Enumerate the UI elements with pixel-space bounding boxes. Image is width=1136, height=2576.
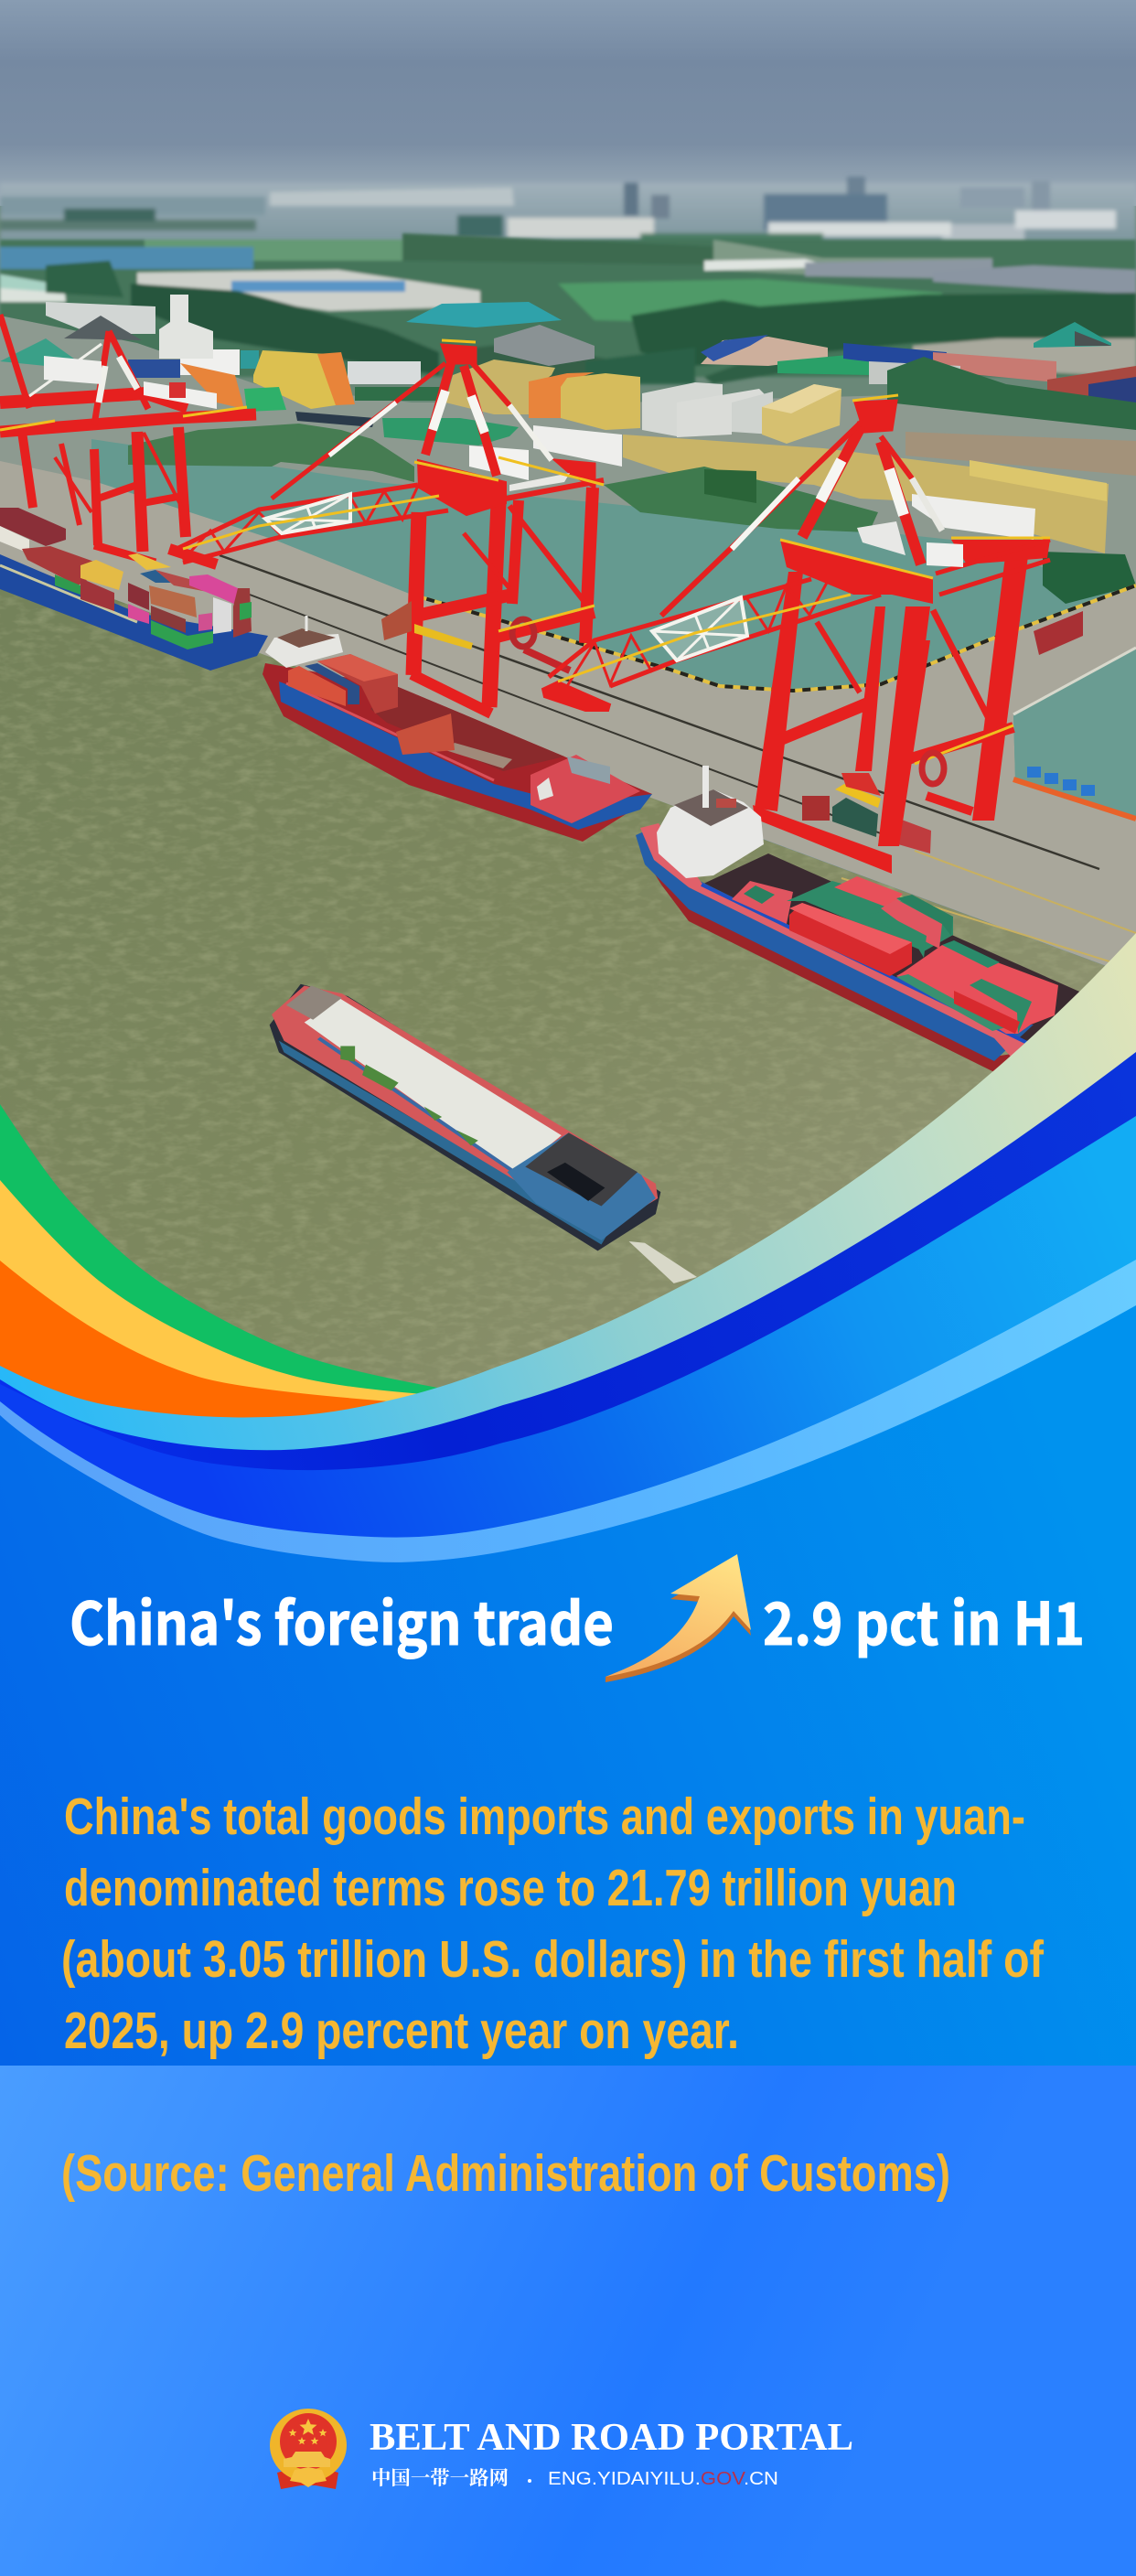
quay	[0, 461, 1136, 977]
crane 2	[169, 340, 622, 714]
website address: ENG.YIDAIYILU. GOV.CN	[548, 2469, 778, 2489]
hold	[702, 853, 1086, 1043]
white tower	[159, 295, 213, 359]
river	[0, 557, 1136, 1647]
ship 1	[0, 508, 268, 671]
fields, lots and tree lines	[0, 233, 1136, 384]
basin water	[91, 439, 1136, 823]
mast	[802, 424, 921, 564]
centre crane leg over truck	[878, 640, 930, 846]
boom	[549, 579, 881, 686]
mid blue band	[0, 1116, 1136, 1647]
crane 1 machinery houses	[44, 356, 102, 384]
pale teal band	[0, 933, 1136, 1647]
deck rail	[702, 885, 1027, 1043]
far right container rows	[701, 322, 1136, 430]
body text: 2025, up 2.9 percent year on year.	[64, 2002, 739, 2060]
mast	[425, 363, 497, 476]
main blue background	[0, 1305, 1136, 2066]
gantry legs	[755, 572, 803, 811]
wheelhouse	[507, 1132, 656, 1240]
crane 1	[0, 315, 256, 563]
boom	[177, 485, 448, 563]
sky	[0, 0, 1136, 206]
machinery houses	[912, 494, 1035, 540]
main body	[418, 460, 506, 515]
lower background panel	[0, 2066, 1136, 2576]
truck on causeway	[1034, 611, 1083, 655]
crane 1 cab house	[144, 381, 217, 409]
blue hull band	[636, 828, 1034, 1061]
barge deck	[272, 985, 658, 1232]
machinery houses	[509, 473, 570, 491]
truck cab	[802, 796, 830, 821]
cable wheel	[922, 753, 944, 784]
gantry legs	[413, 512, 419, 675]
tank	[305, 999, 562, 1173]
crane spreader	[835, 784, 881, 808]
distant city	[0, 177, 1136, 284]
port photograph	[0, 0, 1136, 1647]
dark blue band	[0, 1052, 1136, 1647]
barge hull	[270, 984, 660, 1250]
separator dot	[528, 2479, 531, 2483]
ship 2	[263, 616, 652, 842]
icon: rising arrow	[606, 1554, 751, 1682]
teal dome	[406, 302, 562, 327]
quay markings	[220, 555, 1136, 970]
stern deck	[286, 985, 342, 1020]
red container	[898, 819, 931, 853]
cable wheel	[512, 619, 534, 647]
red lower hull	[640, 851, 1024, 1072]
superstructure	[657, 789, 764, 878]
reed banks	[128, 424, 1136, 604]
orange band	[0, 1261, 402, 1555]
wake	[629, 1241, 697, 1283]
stacked containers	[180, 350, 1109, 553]
main body	[780, 540, 933, 604]
ship 3	[636, 766, 1086, 1072]
crane 3	[542, 395, 1050, 874]
forward containers	[896, 945, 1058, 1034]
main red stack	[789, 903, 912, 976]
shore signs	[1027, 767, 1095, 796]
solar panel	[547, 1163, 605, 1201]
green container	[832, 798, 878, 837]
river barge	[270, 984, 697, 1283]
low containers	[732, 881, 793, 924]
Chinese name: 中国一带一路网	[371, 2467, 509, 2489]
title	[70, 1578, 1085, 1662]
spreader and trailer	[414, 624, 473, 649]
right water	[1013, 648, 1136, 819]
office building	[494, 325, 595, 366]
green band	[0, 1104, 448, 1555]
ribbon swoosh	[0, 933, 1136, 2066]
left works area	[0, 302, 1136, 640]
timber stacks	[906, 432, 1136, 476]
light blue stripe	[0, 1260, 1136, 1647]
title right part: 2.9 pct in H1	[763, 1578, 1085, 1662]
logo: Belt and Road Portal	[270, 2409, 853, 2489]
icon: national emblem	[270, 2409, 347, 2489]
pink deck	[640, 823, 1027, 1057]
land base	[0, 206, 1136, 663]
plants	[340, 1046, 478, 1146]
portal name: BELT AND ROAD PORTAL	[370, 2417, 853, 2459]
title left part: China's foreign trade	[70, 1578, 614, 1662]
body text	[61, 1787, 1045, 2060]
yellow band	[0, 1180, 434, 1555]
